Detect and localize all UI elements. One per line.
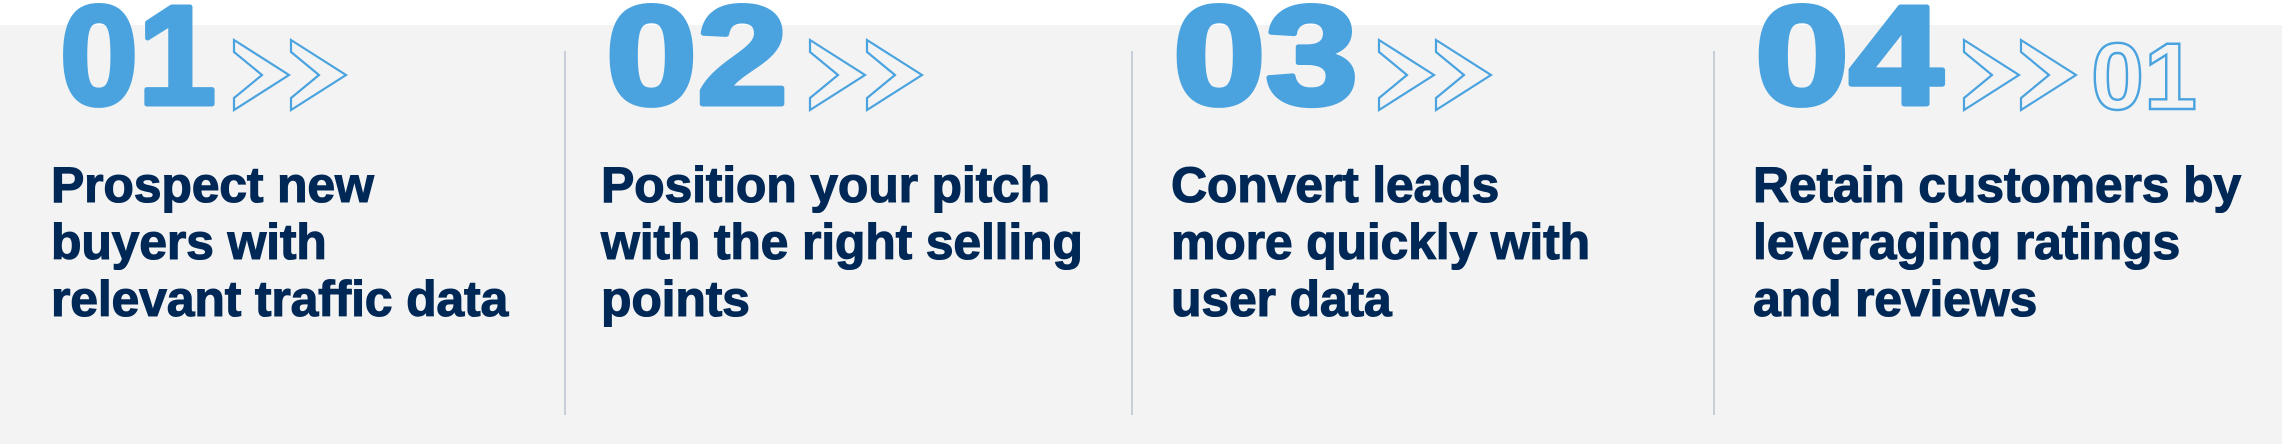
text: prospect: buyers with bbox=[51, 214, 327, 270]
text: prospect: relevant traffic data bbox=[51, 271, 509, 327]
text: retain: leveraging ratings bbox=[1753, 214, 2180, 270]
icon: double chevron bbox=[810, 40, 922, 110]
icon: double chevron bbox=[1964, 40, 2076, 110]
text: convert: Convert leads bbox=[1171, 157, 1499, 213]
panel: step 01 bbox=[51, 0, 509, 327]
text: convert: user data bbox=[1171, 271, 1393, 327]
icon: double chevron bbox=[234, 40, 346, 110]
text: retain: and reviews bbox=[1753, 271, 2037, 327]
panel: step 03 bbox=[1171, 0, 1590, 327]
panel: step 02 bbox=[600, 0, 1083, 327]
text: prospect: Prospect new bbox=[51, 157, 374, 213]
outline number 01: 01 bbox=[2091, 24, 2197, 130]
text: retain: Retain customers by bbox=[1753, 157, 2241, 213]
text: position: with the right selling bbox=[600, 214, 1083, 270]
text: convert: more quickly with bbox=[1171, 214, 1590, 270]
text: position: points bbox=[601, 271, 750, 327]
panel: step 04 bbox=[1753, 0, 2241, 327]
text: position: Position your pitch bbox=[601, 157, 1050, 213]
icon: double chevron bbox=[1379, 40, 1491, 110]
